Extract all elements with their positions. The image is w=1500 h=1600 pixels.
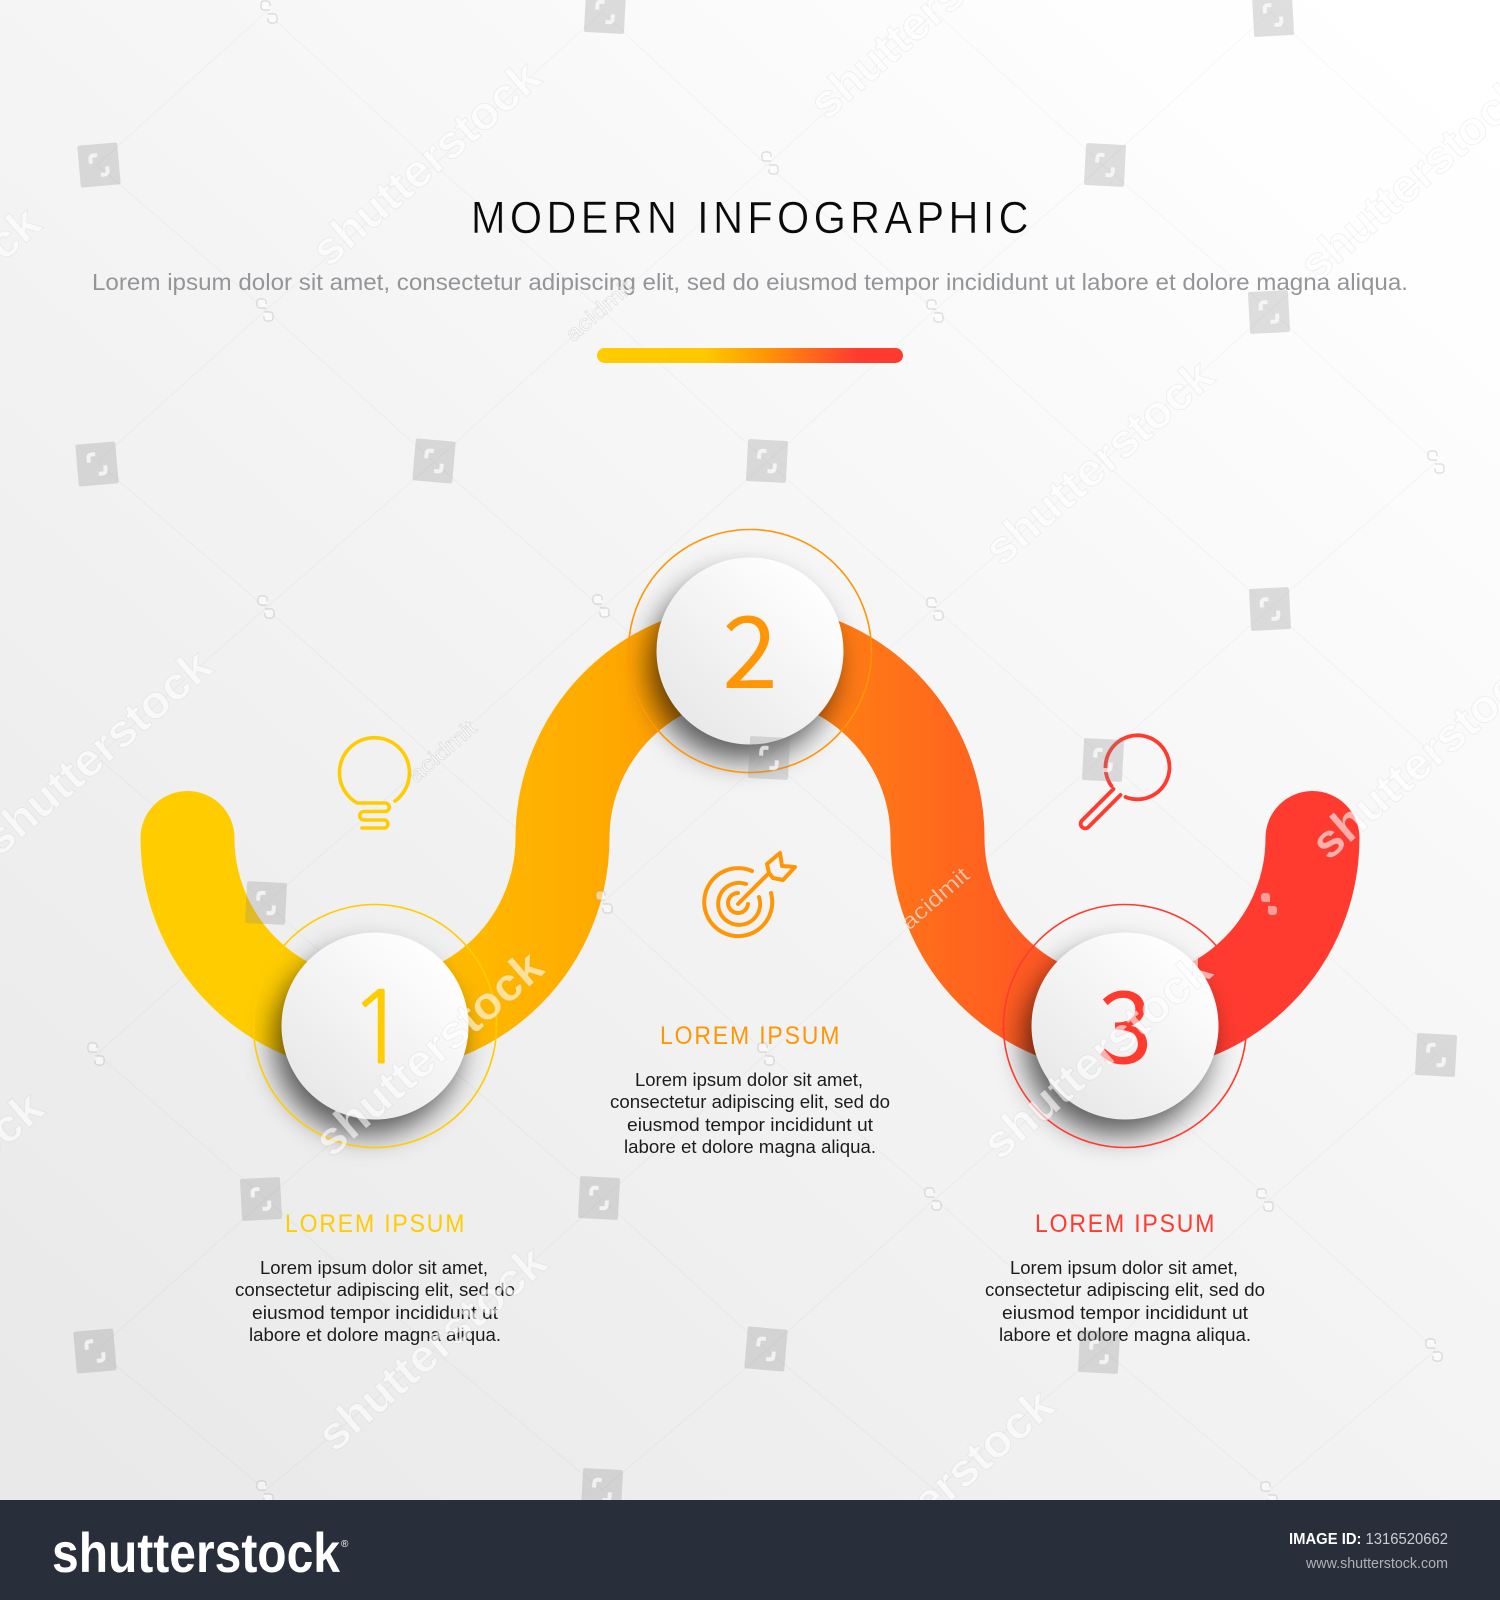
body 2: labore et dolore magna aliqua. <box>624 1136 876 1157</box>
step 1 marker <box>254 904 496 1148</box>
gradient divider bar <box>597 348 903 363</box>
wave ribbon <box>188 650 1312 1026</box>
ring 2 <box>628 530 872 772</box>
contributor wordmarks: acidmit <box>896 862 974 935</box>
registered mark: ® <box>341 1539 349 1550</box>
footer logo: shutterstock <box>52 1521 341 1584</box>
ring 1 <box>254 904 496 1148</box>
watermark wordmarks: shutterstock <box>301 50 550 276</box>
header <box>92 193 1408 363</box>
step 1 text <box>235 1210 515 1345</box>
shadow 1 <box>274 949 460 1135</box>
title: MODERN INFOGRAPHIC <box>471 193 1029 243</box>
body 1: consectetur adipiscing elit, sed do <box>235 1279 515 1300</box>
disc 2 <box>656 558 844 744</box>
number 1: 1 <box>348 978 408 1078</box>
disc 3 <box>1032 932 1218 1120</box>
contributor wordmarks <box>403 274 974 935</box>
watermark wordmarks: shutterstock <box>814 1378 1063 1600</box>
contributor wordmarks: acidmit <box>560 274 638 347</box>
icon: light bulb <box>339 738 409 828</box>
disc 1 <box>282 932 468 1120</box>
watermark wordmarks: shutterstock <box>307 1235 556 1461</box>
step 3 text <box>985 1210 1265 1345</box>
watermark wordmarks: shutterstock <box>304 940 553 1166</box>
body 3: eiusmod tempor incididunt ut <box>1002 1302 1248 1323</box>
body 2: consectetur adipiscing elit, sed do <box>610 1091 890 1112</box>
watermark wordmarks: shutterstock <box>972 943 1221 1169</box>
image id: IMAGE ID: 1316520662 <box>1289 1531 1448 1548</box>
step 3 marker <box>1004 904 1246 1148</box>
icon: target with arrow <box>704 853 795 936</box>
step 2 marker <box>628 530 872 772</box>
body 3: labore et dolore magna aliqua. <box>999 1324 1251 1345</box>
shadow 2 <box>649 574 835 760</box>
body 1 <box>235 1257 515 1345</box>
body 3: Lorem ipsum dolor sit amet, <box>1010 1257 1238 1278</box>
number 3: 3 <box>1097 947 1153 1092</box>
heading 1: LOREM IPSUM <box>285 1210 464 1238</box>
shadow 3 <box>1024 949 1210 1135</box>
watermark wordmarks: shutterstock <box>974 349 1223 575</box>
ring 3 <box>1004 904 1246 1148</box>
step 2 text <box>610 1022 890 1157</box>
body 1: Lorem ipsum dolor sit amet, <box>260 1257 488 1278</box>
number 2: 2 <box>722 572 778 717</box>
body 2 <box>610 1069 890 1157</box>
footer url: www.shutterstock.com <box>1305 1555 1448 1572</box>
body 2: Lorem ipsum dolor sit amet, <box>635 1069 863 1090</box>
contributor wordmarks: acidmit <box>403 715 481 788</box>
body 2: eiusmod tempor incididunt ut <box>627 1114 873 1135</box>
heading 2: LOREM IPSUM <box>660 1022 839 1050</box>
body 1: eiusmod tempor incididunt ut <box>252 1302 498 1323</box>
footer bar <box>0 1500 1500 1600</box>
body 1: labore et dolore magna aliqua. <box>249 1324 501 1345</box>
subtitle: Lorem ipsum dolor sit amet, consectetur adipiscing elit, sed do eiusmod tempor incididunt ut labore et dolore magna aliqua. <box>92 269 1408 295</box>
body 3 <box>985 1257 1265 1345</box>
body 3: consectetur adipiscing elit, sed do <box>985 1279 1265 1300</box>
icon: magnifying glass <box>1081 735 1169 828</box>
heading 3: LOREM IPSUM <box>1035 1210 1214 1238</box>
